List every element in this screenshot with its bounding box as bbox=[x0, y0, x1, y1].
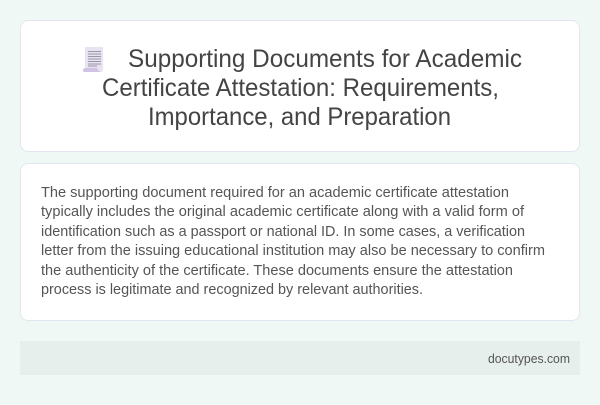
title bbox=[102, 45, 522, 131]
footer source text: docutypes.com bbox=[488, 351, 570, 366]
description text: typically includes the original academic certificate along with a valid form of bbox=[41, 204, 525, 220]
footer bar bbox=[20, 341, 580, 375]
panel: title card bbox=[20, 20, 580, 152]
description text: process is legitimate and recognized by relevant authorities. bbox=[41, 282, 423, 298]
panel: description card bbox=[20, 163, 580, 321]
title: Supporting Documents for Academic bbox=[128, 45, 522, 73]
description text: identification such as a passport or national ID. In some cases, a verification bbox=[41, 224, 525, 240]
title: Importance, and Preparation bbox=[148, 103, 451, 131]
description text: the authenticity of the certificate. These documents ensure the attestation bbox=[41, 263, 513, 279]
description text: letter from the issuing educational institution may also be necessary to confirm bbox=[41, 243, 545, 259]
description text bbox=[41, 185, 545, 298]
icon: document scroll bbox=[83, 47, 103, 72]
description text: The supporting document required for an academic certificate attestation bbox=[41, 185, 509, 201]
title: Certificate Attestation: Requirements, bbox=[102, 74, 499, 102]
